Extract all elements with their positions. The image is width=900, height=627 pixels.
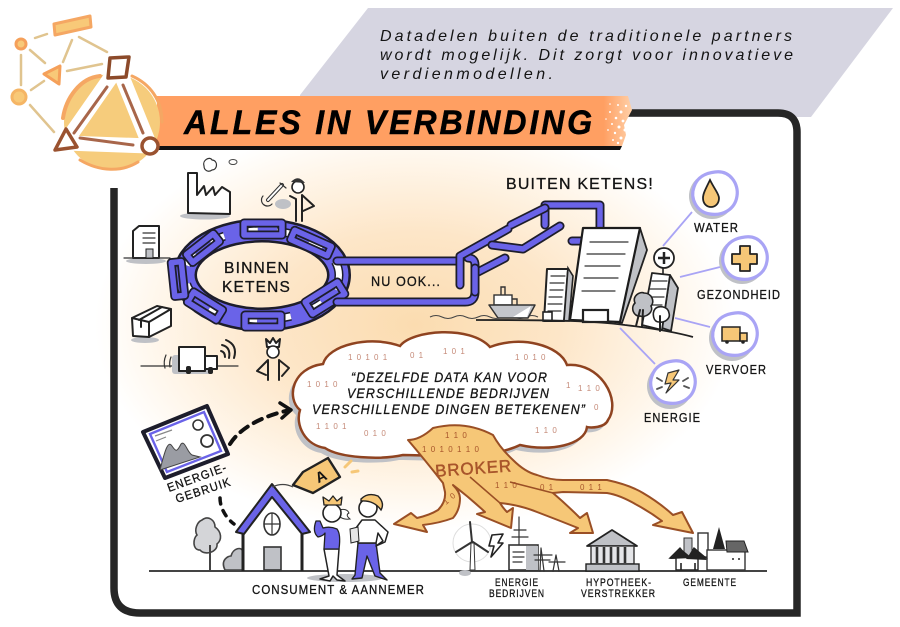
binary digits: 1 1 0	[578, 384, 601, 393]
label: gezondheid: GEZONDHEID	[697, 287, 781, 302]
panel frame	[114, 113, 797, 613]
binary digits: 0 1 0	[364, 429, 387, 438]
background glow	[95, 120, 735, 530]
label: binnen ketens: KETENS	[222, 279, 291, 296]
broker arrows: 1 1 0	[495, 481, 518, 490]
label: energiegebruik: ENERGIE-	[165, 460, 229, 495]
binary digits: 1 1 0	[535, 426, 558, 435]
label: buiten ketens: BUITEN KETENS!	[506, 176, 654, 193]
left building	[543, 268, 573, 321]
icon: house with label tag	[236, 458, 358, 571]
quote	[312, 369, 586, 417]
binary digits: 1 0 1 0	[515, 353, 546, 362]
label: hypotheekverstrekker	[581, 577, 656, 600]
binary digits: 1	[566, 381, 571, 390]
trees by house	[194, 518, 243, 570]
broker arrows: 1 1 0	[445, 431, 468, 440]
broker arrows: 1 0	[442, 491, 458, 507]
broker arrows: 0 1	[540, 483, 554, 492]
intro text: verdienmodellen.	[380, 66, 553, 83]
figure: consumer	[314, 496, 350, 581]
icon: cross	[732, 246, 757, 271]
ground curve	[476, 320, 693, 337]
binary digits: 1 0 1 0	[307, 380, 338, 389]
label: broker: BROKER	[435, 456, 513, 481]
label: energie bedrijven: ENERGIE	[495, 577, 539, 589]
label: consument en aannemer: CONSUMENT & AANNEMER	[252, 582, 425, 597]
hospital building	[642, 248, 678, 331]
connector lines to sectors	[620, 212, 720, 364]
icon: person with crown	[257, 338, 289, 380]
label: water: WATER	[694, 220, 739, 235]
title banner	[157, 96, 632, 150]
city skyline with hospital and trees	[476, 228, 693, 337]
icon: factory	[180, 158, 237, 220]
intro text	[380, 28, 793, 83]
icon: drop	[703, 180, 719, 207]
logo: network triangle	[12, 16, 162, 170]
label: energiegebruik: GEBRUIK	[174, 475, 233, 506]
data cloud	[289, 332, 612, 463]
main tower	[570, 228, 647, 323]
broker arrows	[394, 425, 693, 533]
icon: municipality buildings	[670, 527, 748, 570]
icon: van	[722, 327, 747, 344]
icon: mechanic	[261, 178, 314, 221]
binary digits: 1 1 0 1	[316, 422, 347, 431]
label: energie bedrijven	[489, 577, 545, 600]
sector: water	[689, 172, 739, 235]
dashed arrow to cloud	[230, 403, 291, 444]
intro text: Datadelen buiten de traditionele partners	[380, 28, 792, 45]
trees	[633, 293, 669, 331]
icon: lightning	[657, 370, 689, 393]
dashed line from house	[220, 498, 234, 524]
figure: contractor	[350, 495, 388, 580]
binary digits: 1 0 1	[443, 347, 466, 356]
ground line	[149, 570, 767, 572]
title: ALLES IN VERBINDING	[183, 104, 595, 142]
label: energie: ENERGIE	[644, 410, 701, 425]
panel: intro callout	[300, 8, 893, 117]
sector: energie	[644, 361, 701, 425]
binary digits: 0 1	[410, 351, 424, 360]
icon: house with label tag: A	[313, 467, 330, 487]
binary digits: 1 0 1 0 1	[348, 353, 388, 362]
icon: energy tablet	[143, 406, 228, 478]
quote: “DEZELFDE DATA KAN VOOR	[351, 369, 548, 385]
binary digits	[307, 347, 601, 438]
chain: ring of links	[171, 223, 345, 327]
chain: long links to outside	[337, 205, 600, 302]
sector: gezondheid	[697, 237, 781, 302]
icon: delivery van with signal	[141, 340, 238, 374]
icon: wind turbine and power plant	[453, 517, 565, 576]
label: hypotheekverstrekker: VERSTREKKER	[581, 588, 656, 600]
label: binnen ketens	[222, 260, 291, 296]
sector: vervoer	[706, 313, 767, 377]
icon: bank	[586, 530, 639, 571]
quote: VERSCHILLENDE DINGEN BETEKENEN”	[312, 401, 586, 417]
broker arrows: 0 1 1	[580, 483, 603, 492]
label: nu ook: NU OOK...	[371, 273, 441, 289]
intro text: wordt mogelijk. Dit zorgt voor innovatieve	[380, 47, 793, 64]
icon: ship and waves	[430, 287, 538, 318]
label: binnen ketens: BINNEN	[224, 260, 290, 277]
figures: consumer and contractor	[307, 495, 388, 582]
label: energie bedrijven: BEDRIJVEN	[489, 588, 545, 600]
quote: VERSCHILLENDE BEDRIJVEN	[347, 385, 550, 401]
icon: office building	[124, 226, 170, 264]
label: hypotheekverstrekker: HYPOTHEEK-	[586, 577, 652, 589]
binary digits: 0	[594, 403, 599, 412]
icon: parcel	[131, 306, 171, 343]
label: vervoer: VERVOER	[706, 362, 767, 377]
broker arrows: 1 0 1 0 1 1 0	[422, 445, 480, 454]
label: gemeente: GEMEENTE	[683, 577, 737, 589]
